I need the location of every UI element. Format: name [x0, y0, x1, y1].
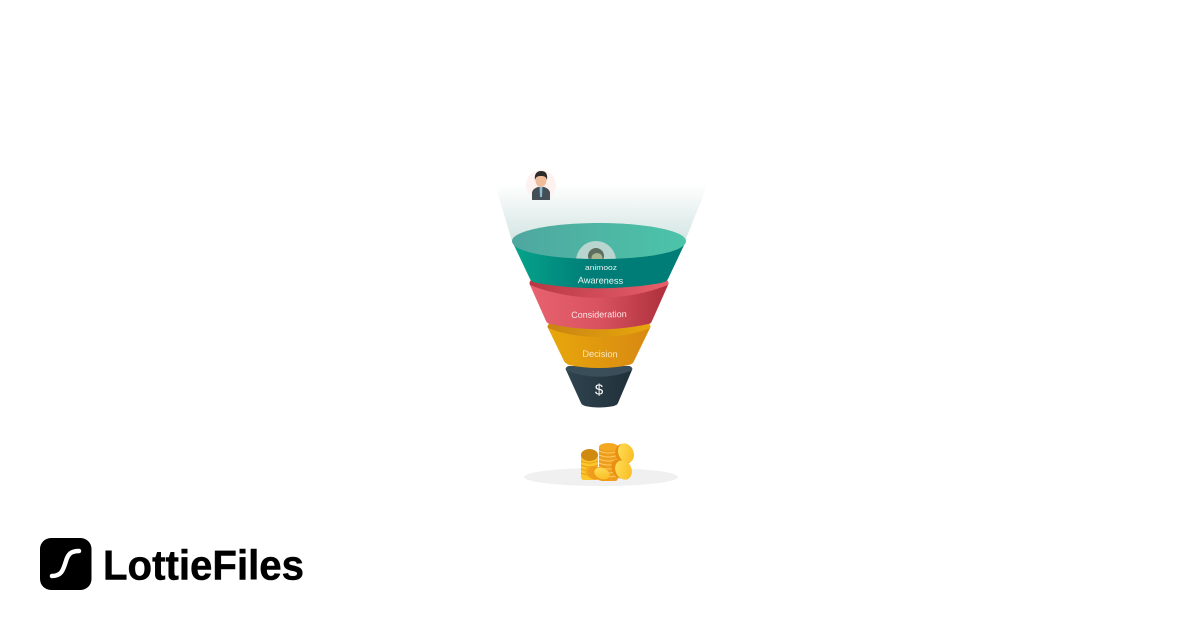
label: awareness: Awareness: [578, 275, 624, 286]
wordmark: LottieFiles: LottieFiles: [103, 542, 304, 588]
funnel top opening: [512, 223, 686, 259]
label: dollar sign: $: [595, 382, 604, 398]
icon: businessman avatar: [526, 170, 556, 200]
leaning coins right: [612, 441, 636, 467]
panel: awareness funnel tier: [512, 223, 686, 288]
panel: decision funnel tier: [548, 323, 650, 368]
label: consideration: Consideration: [571, 309, 627, 320]
icon: LottieFiles logo mark: [40, 538, 92, 590]
light beam above funnel: [495, 184, 708, 241]
tall coin stack: [599, 446, 618, 481]
label: decision: Decision: [582, 349, 618, 359]
loose coins front: [583, 463, 601, 481]
panel: dark dollar funnel tier: [566, 366, 632, 408]
ground shadow: [524, 468, 678, 486]
brand: animooz: animooz: [585, 263, 617, 272]
sales funnel infographic canvas: [40, 170, 703, 590]
icon: gold coin piles: [581, 441, 637, 483]
left coin stack: [581, 454, 598, 480]
icon: woman avatar in funnel: [576, 241, 616, 259]
panel: consideration funnel tier: [530, 279, 668, 329]
